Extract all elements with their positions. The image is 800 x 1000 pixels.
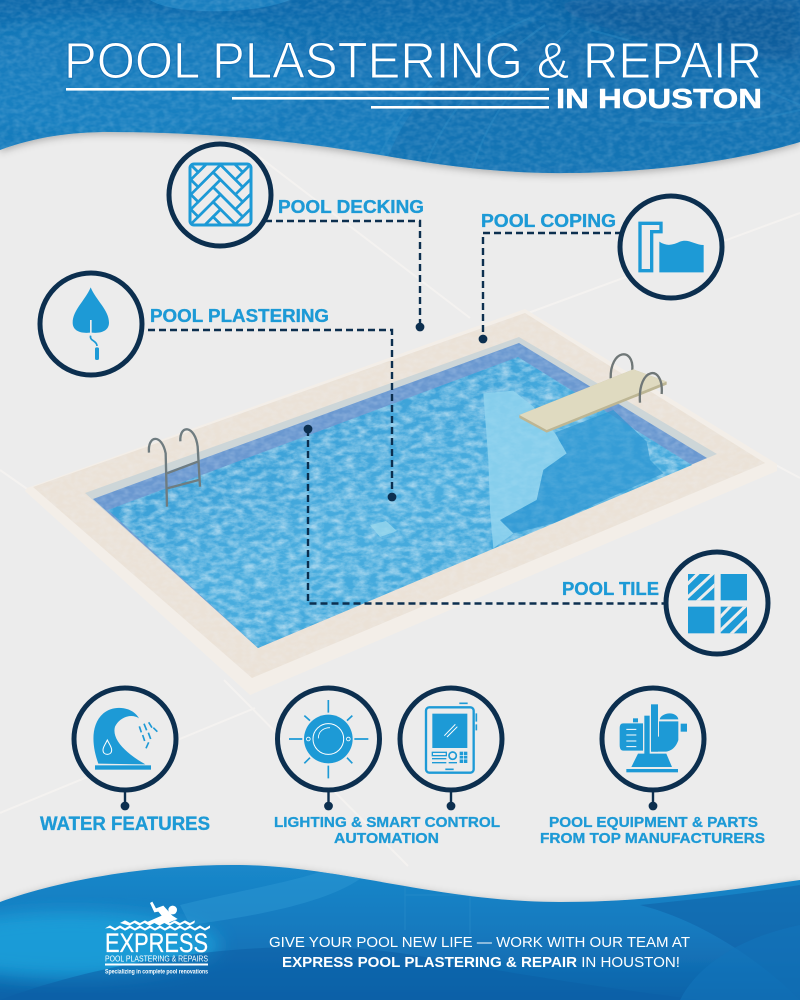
cta line 2: EXPRESS POOL PLASTERING & REPAIR IN HOUSTON! bbox=[282, 955, 680, 971]
callout: pool tile bbox=[304, 425, 768, 654]
callout: pool plastering bbox=[40, 273, 396, 501]
title line 1: POOL PLASTERING & REPAIR bbox=[64, 32, 762, 89]
logo rule bbox=[105, 964, 208, 966]
diving board bbox=[519, 369, 667, 433]
callout: pool coping bbox=[479, 196, 722, 343]
logo tagline: Specializing in complete pool renovations bbox=[105, 968, 208, 976]
logo wordmark: EXPRESS bbox=[105, 928, 208, 958]
label: pool equipment and parts: POOL EQUIPMENT & PARTS bbox=[549, 814, 758, 831]
lighting icon bbox=[278, 688, 380, 810]
water bbox=[108, 357, 692, 648]
feature: water features bbox=[40, 688, 210, 835]
logo bbox=[105, 902, 210, 976]
inlet reflection bbox=[370, 521, 397, 537]
floor tile joints bbox=[0, 133, 800, 866]
icon: parquet decking bbox=[166, 142, 274, 248]
pool bbox=[25, 309, 777, 695]
tile band bbox=[93, 343, 707, 648]
header panel bbox=[0, 0, 800, 180]
diving board rail rear bbox=[611, 354, 632, 378]
feature: lighting and automation bbox=[274, 688, 502, 847]
label: pool plastering: POOL PLASTERING bbox=[150, 306, 329, 326]
decking connector bbox=[265, 221, 424, 331]
title line 2: IN HOUSTON bbox=[556, 83, 762, 114]
label: automation: AUTOMATION bbox=[334, 830, 439, 847]
plastering connector bbox=[137, 330, 396, 501]
tablet icon bbox=[400, 688, 502, 810]
icon: coping bbox=[620, 196, 722, 298]
callout: pool decking bbox=[166, 142, 424, 332]
title rules bbox=[66, 88, 549, 109]
pump icon bbox=[602, 688, 704, 810]
pool deck bbox=[25, 309, 777, 695]
icon: tiles bbox=[666, 552, 768, 654]
cta line 1: GIVE YOUR POOL NEW LIFE — WORK WITH OUR TEAM AT bbox=[269, 935, 690, 951]
pool ladder bbox=[149, 429, 200, 507]
label: lighting and smart control: LIGHTING & SMART CONTROL bbox=[274, 814, 500, 831]
label: pool coping: POOL COPING bbox=[481, 211, 616, 231]
logo swimmer and waves bbox=[105, 902, 210, 931]
feature: pool equipment bbox=[540, 688, 765, 847]
diving board rail front bbox=[640, 373, 662, 403]
label: water features: WATER FEATURES bbox=[40, 814, 210, 835]
footer call to action bbox=[269, 935, 690, 971]
logo subtitle: POOL PLASTERING & REPAIRS bbox=[105, 954, 208, 964]
water icon bbox=[74, 688, 176, 810]
footer panel bbox=[0, 862, 800, 1000]
deep end light shape bbox=[483, 391, 567, 548]
label: from top manufacturers: FROM TOP MANUFACTURERS bbox=[540, 830, 765, 847]
board shadow bbox=[500, 410, 663, 533]
coping shadow strip bbox=[85, 337, 717, 648]
label: pool decking: POOL DECKING bbox=[278, 197, 424, 217]
title bbox=[64, 32, 762, 114]
coping connector bbox=[479, 233, 622, 343]
label: pool tile: POOL TILE bbox=[562, 579, 659, 599]
tile connector bbox=[304, 425, 666, 604]
icon: trowel bbox=[40, 273, 142, 375]
